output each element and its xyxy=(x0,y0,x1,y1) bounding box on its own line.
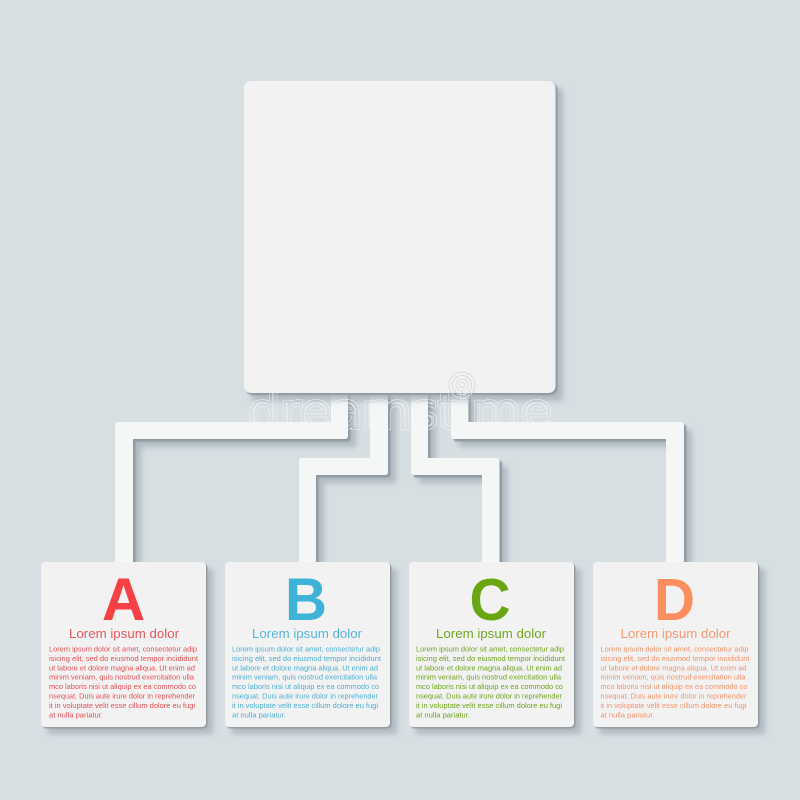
card A body text: mco laboris nisi ut aliquip ex ea commodo co xyxy=(49,682,196,691)
card C body text: at nulla pariatur. xyxy=(416,710,470,719)
card A heading: Lorem ipsum dolor xyxy=(69,627,179,641)
card B body text: nsequat. Duis aute irure dolor in reprehender xyxy=(232,692,378,700)
card D letter: D xyxy=(654,567,695,633)
card A body text: minim veniam, quis nostrud exercitation ulla xyxy=(49,673,195,682)
card B letter: B xyxy=(285,566,327,633)
watermark word: dreamstime xyxy=(248,384,552,440)
card B body text: ut labore et dolore magna aliqua. Ut enim ad xyxy=(232,663,378,672)
card A panel xyxy=(41,562,213,734)
card D body text: ut labore et dolore magna aliqua. Ut enim ad xyxy=(600,663,746,672)
card C body text: Lorem ipsum dolor sit amet, consectetur adip xyxy=(416,644,564,654)
card A body text: it in voluptate velit esse cillum dolore eu fugi xyxy=(49,701,195,710)
card D body text: nsequat. Duis aute irure dolor in reprehender xyxy=(600,692,747,700)
card D panel xyxy=(593,562,765,734)
watermark spiral xyxy=(449,372,475,398)
card C body text: minim veniam, quis nostrud exercitation ulla xyxy=(416,673,562,682)
card A body text: isicing elit, sed do eiusmod tempor incididunt xyxy=(49,654,199,663)
card B body text xyxy=(232,644,382,719)
card D body text: mco laboris nisi ut aliquip ex ea commodo co xyxy=(600,682,748,691)
card D xyxy=(593,562,765,734)
card B body text: mco laboris nisi ut aliquip ex ea commodo co xyxy=(232,682,379,691)
card B body text: Lorem ipsum dolor sit amet, consectetur adip xyxy=(232,644,380,654)
card B panel xyxy=(225,562,397,734)
card C xyxy=(409,562,581,734)
card C body text: mco laboris nisi ut aliquip ex ea commodo co xyxy=(416,682,563,691)
card A body text xyxy=(49,644,199,719)
connector B xyxy=(299,393,396,570)
watermark xyxy=(248,372,552,440)
main blank panel xyxy=(244,81,563,401)
connector D xyxy=(451,393,692,570)
connector A xyxy=(115,393,356,570)
card D body text: it in voluptate velit esse cillum dolore eu fugi xyxy=(600,701,747,710)
card C body text: ut labore et dolore magna aliqua. Ut enim ad xyxy=(416,663,562,672)
card A body text: at nulla pariatur. xyxy=(49,710,103,719)
card D body text: at nulla pariatur. xyxy=(600,710,654,719)
card C panel xyxy=(409,562,581,734)
card B body text: minim veniam, quis nostrud exercitation ulla xyxy=(232,673,378,682)
card A letter: A xyxy=(102,566,145,633)
card A xyxy=(41,562,213,734)
card C body text: nsequat. Duis aute irure dolor in reprehender xyxy=(416,692,562,700)
card C heading: Lorem ipsum dolor xyxy=(436,627,546,641)
card D body text: minim veniam, quis nostrud exercitation ulla xyxy=(600,673,746,682)
card B body text: at nulla pariatur. xyxy=(232,710,286,719)
card A body text: Lorem ipsum dolor sit amet, consectetur adip xyxy=(49,644,197,654)
card B xyxy=(225,562,397,734)
connector C xyxy=(411,393,508,570)
card B body text: isicing elit, sed do eiusmod tempor incididunt xyxy=(232,654,382,663)
card D body text: isicing elit, sed do eiusmod tempor incididunt xyxy=(600,654,750,663)
card B body text: it in voluptate velit esse cillum dolore eu fugi xyxy=(232,701,378,710)
card A body text: ut labore et dolore magna aliqua. Ut enim ad xyxy=(49,663,195,672)
card D heading: Lorem ipsum dolor xyxy=(620,627,730,641)
card D body text xyxy=(600,644,750,719)
card C body text: isicing elit, sed do eiusmod tempor incididunt xyxy=(416,654,566,663)
card B heading: Lorem ipsum dolor xyxy=(252,627,362,641)
card D body text: Lorem ipsum dolor sit amet, consectetur adip xyxy=(600,644,748,654)
card C body text xyxy=(416,644,566,719)
card A body text: nsequat. Duis aute irure dolor in reprehender xyxy=(49,692,195,700)
card C letter: C xyxy=(470,567,510,633)
card C body text: it in voluptate velit esse cillum dolore eu fugi xyxy=(416,701,562,710)
